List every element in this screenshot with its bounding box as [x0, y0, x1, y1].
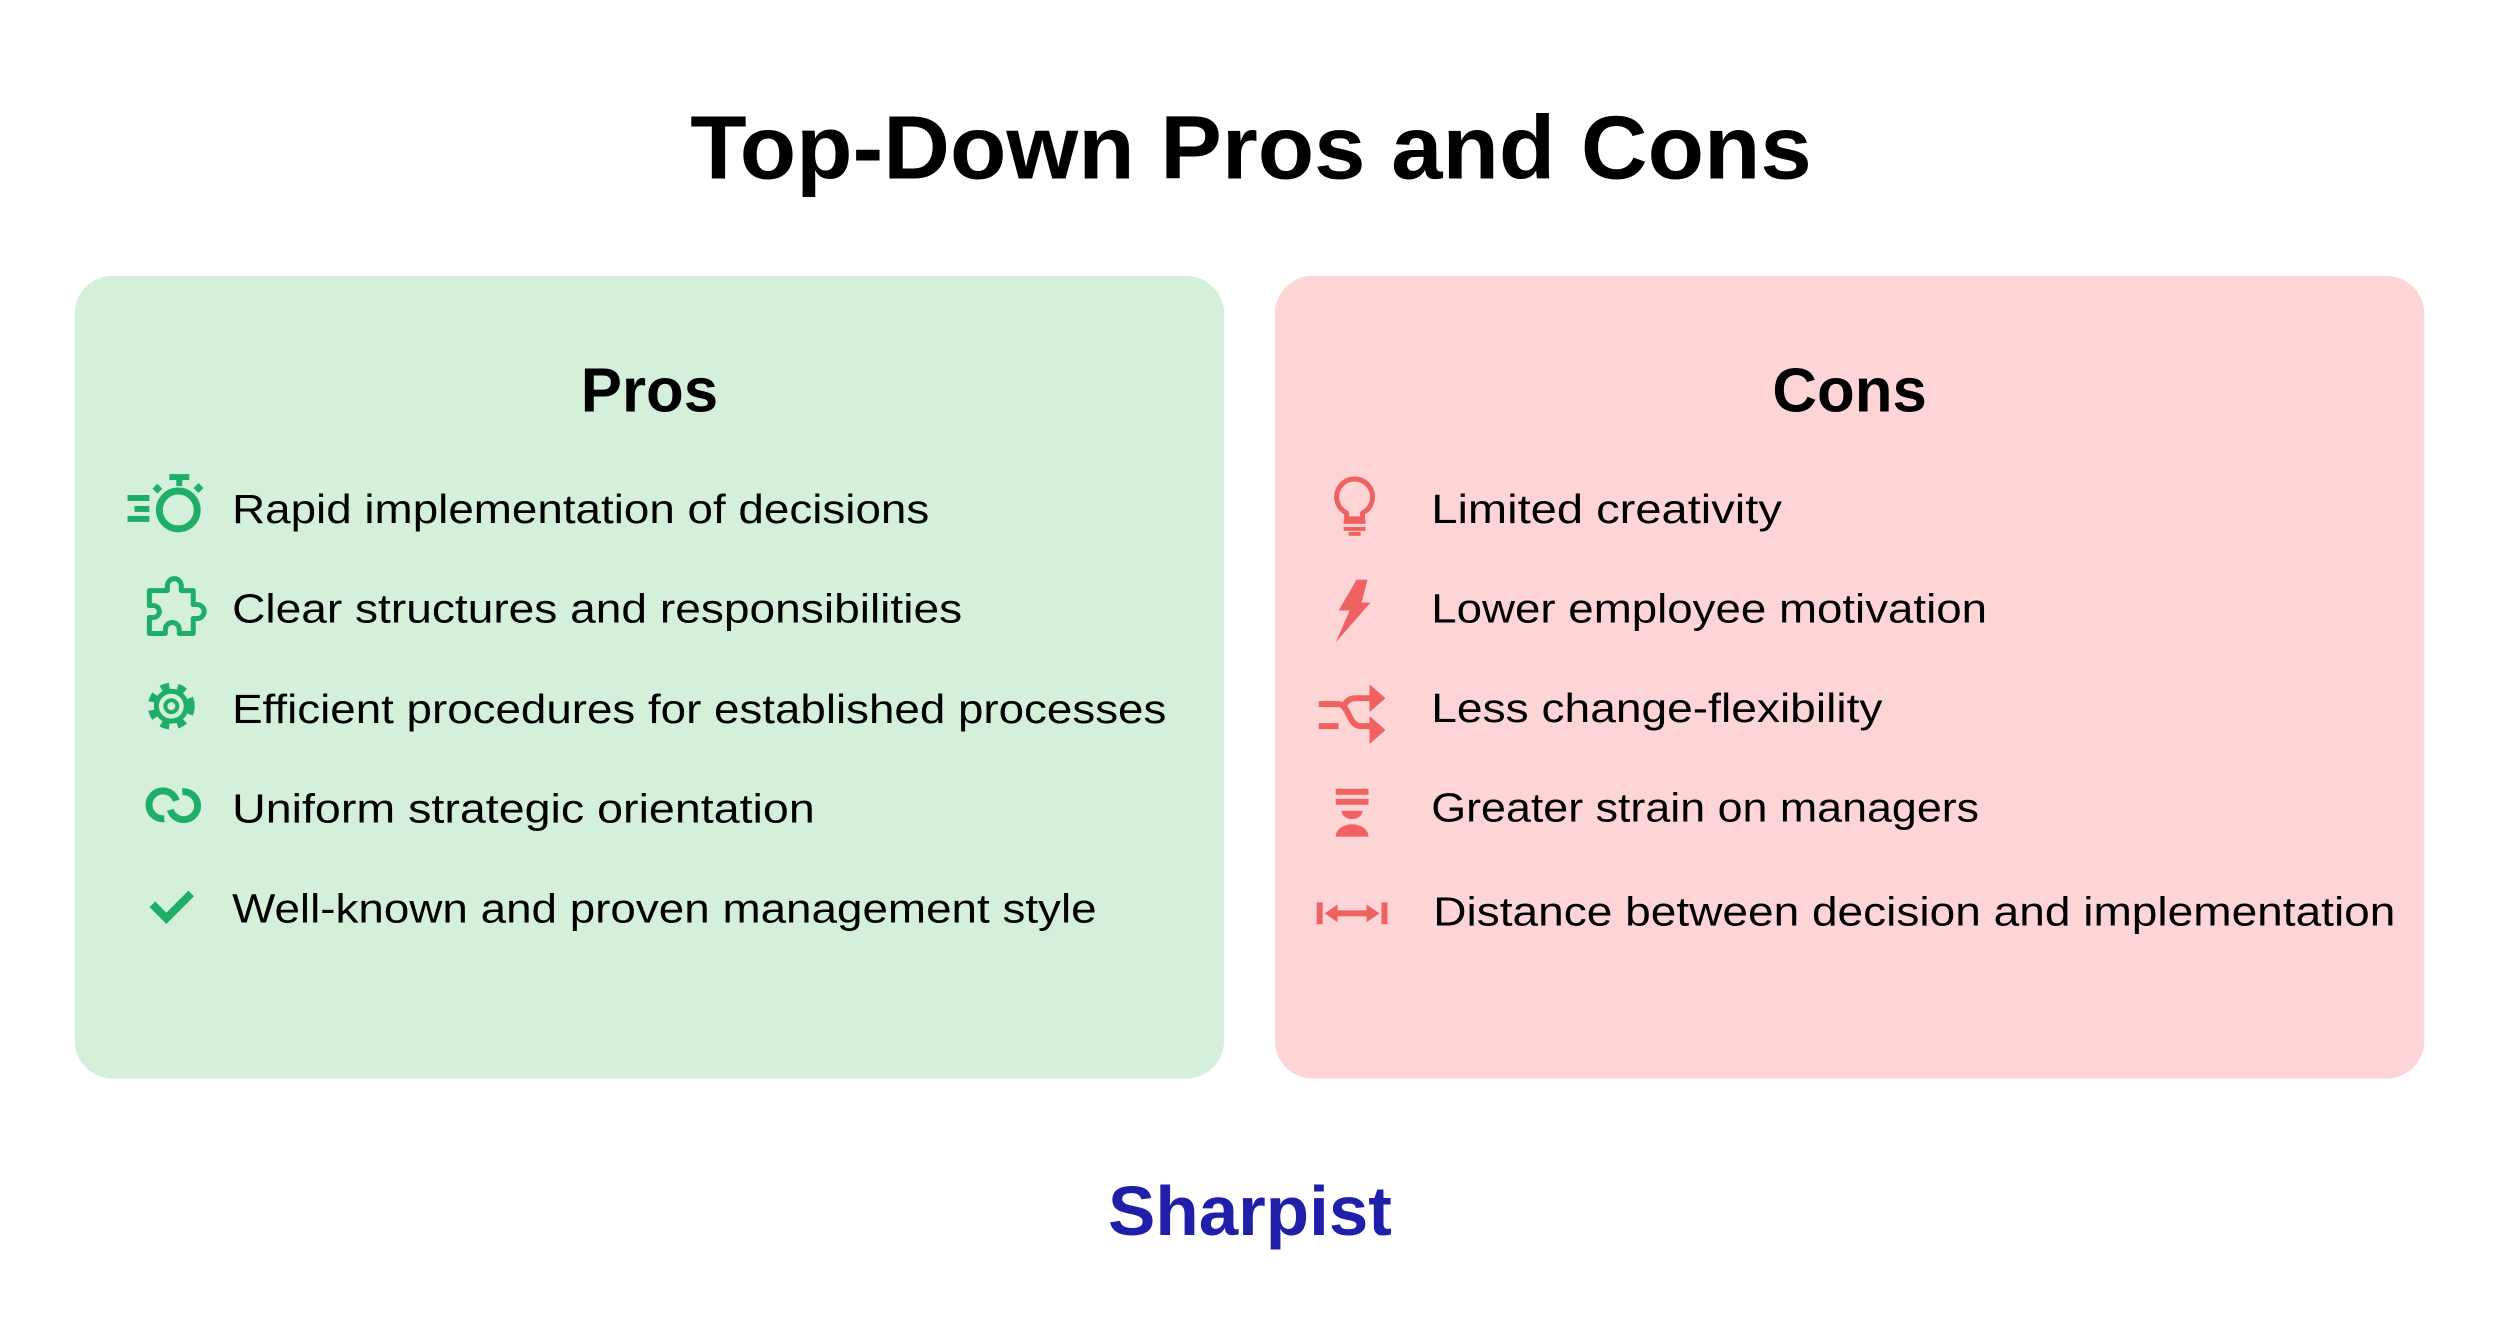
panel: cons [1275, 276, 2424, 1079]
panel: pros [75, 276, 1224, 1079]
item: distance: Distance between decision and implementation [1433, 888, 2395, 934]
item: clear structures [149, 579, 962, 633]
item: less flexibility [1319, 684, 1883, 744]
item: strain on managers [1336, 785, 1979, 837]
item: less flexibility: Less change-flexibility [1431, 685, 1883, 731]
item: uniform orientation: Uniform strategic orientation [232, 786, 815, 832]
item: limited creativity [1337, 479, 1783, 536]
item: limited creativity: Limited creativity [1431, 486, 1783, 532]
item: efficient procedures: Efficient procedures for established processes [232, 686, 1166, 732]
item: clear structures: Clear structures and responsibilities [232, 585, 962, 631]
item: rapid implementation: Rapid implementation of decisions [232, 486, 929, 532]
item: rapid implementation [127, 474, 929, 532]
item: well-known style: Well-known and proven management style [232, 885, 1097, 931]
logo: Sharpist: Sharpist [1108, 1172, 1392, 1250]
item: lower motivation [1336, 580, 1987, 642]
heading: pros: Pros [581, 356, 718, 425]
item: strain on managers: Greater strain on managers [1431, 785, 1979, 831]
item: lower motivation: Lower employee motivation [1431, 585, 1987, 631]
heading: cons: Cons [1772, 356, 1927, 425]
title: Top-Down Pros and Cons [690, 97, 1812, 197]
